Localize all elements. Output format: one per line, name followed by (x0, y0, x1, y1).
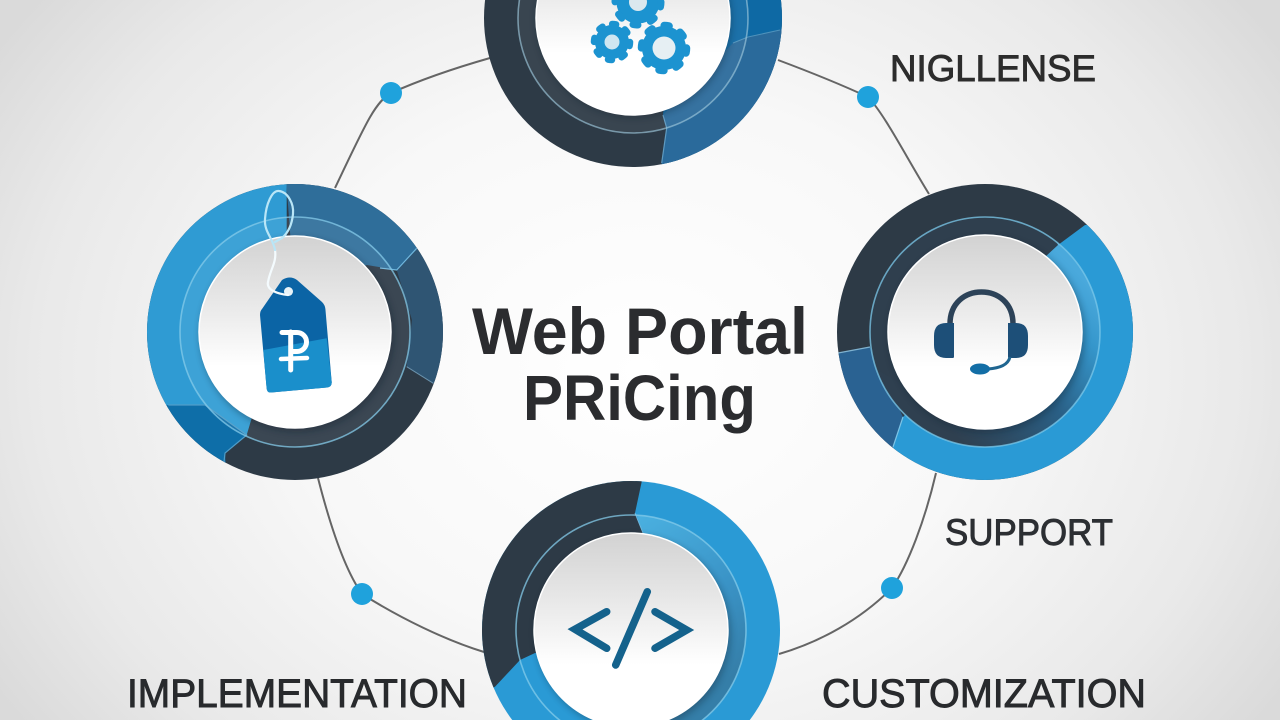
label: upper right: NIGLLENSE (890, 48, 1096, 89)
title: PRiCing (523, 362, 756, 434)
label: implementation: IMPLEMENTATION (127, 672, 467, 716)
icon: code brackets (575, 592, 687, 665)
node dot: upper right (857, 86, 879, 108)
ring: code (bottom) (482, 481, 780, 720)
icon: price tag with ruble sign (260, 191, 332, 393)
icon: three gears (594, 0, 686, 70)
ring: pricing tag (left) (147, 184, 443, 480)
connector: top ring to right ring (778, 60, 929, 194)
node dot: lower right (881, 577, 903, 599)
ring: gears (top) (484, 0, 782, 167)
title (472, 294, 808, 434)
title: Web Portal (472, 294, 808, 368)
label: support: SUPPORT (945, 512, 1113, 553)
connector: left ring to bottom ring (318, 478, 484, 652)
connector: right ring to bottom ring (779, 473, 936, 654)
connector: top ring to left ring (335, 58, 490, 188)
ring: headset (right) (837, 184, 1133, 480)
node dot: lower left (351, 583, 373, 605)
node dot: upper left (380, 82, 402, 104)
icon: headset (934, 292, 1028, 374)
label: customization: CUSTOMIZATION (822, 672, 1146, 716)
